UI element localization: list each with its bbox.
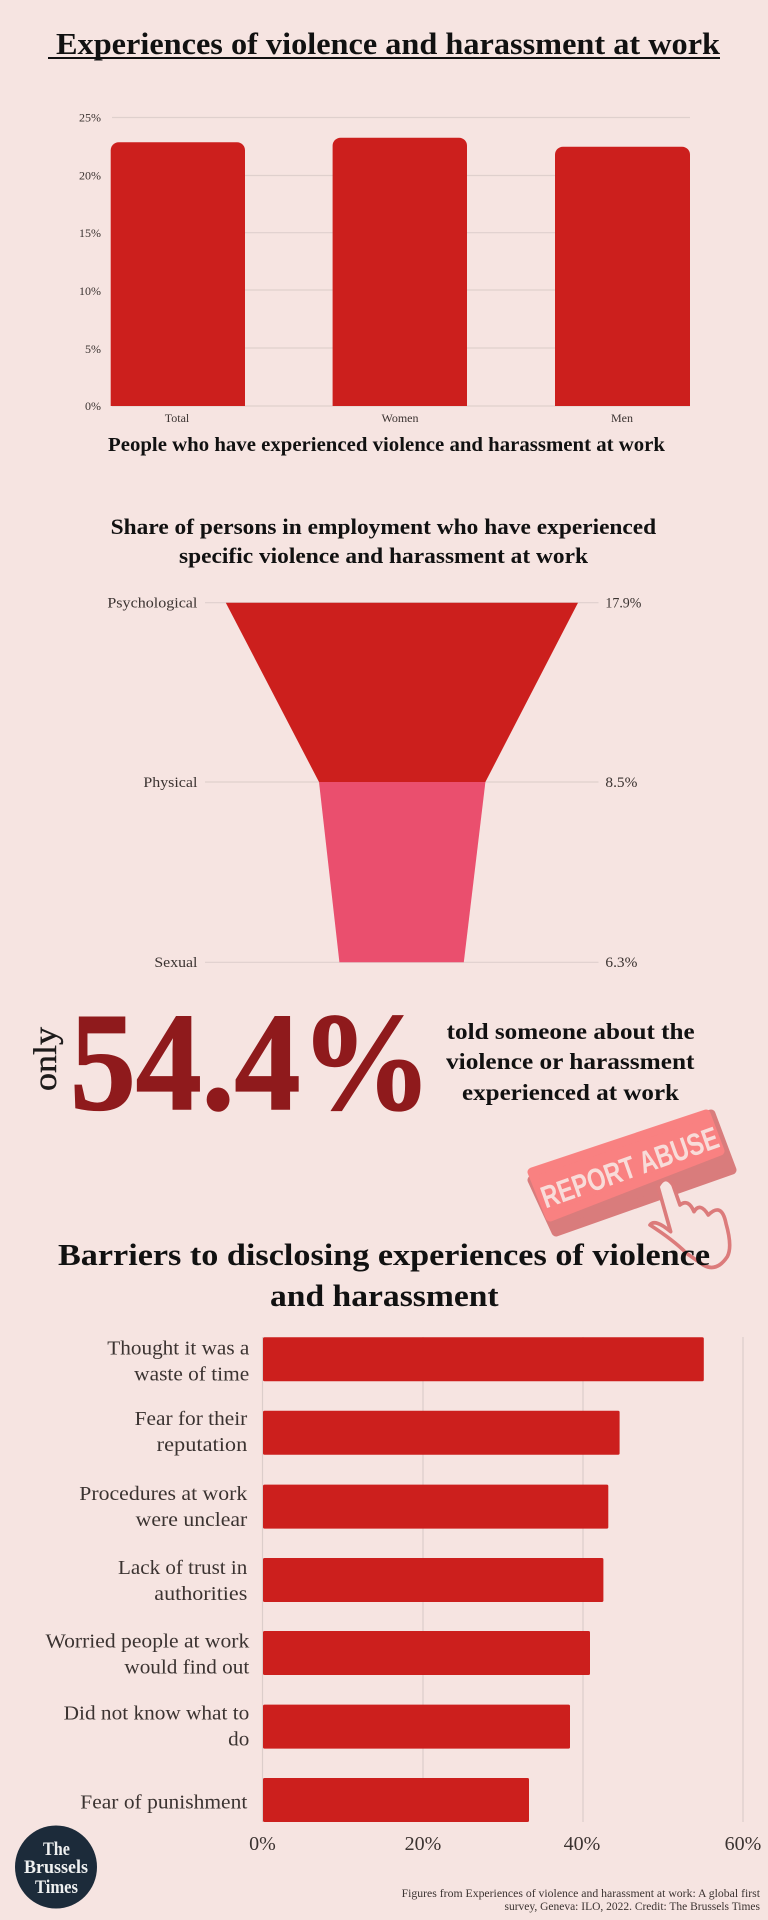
y axis labels (79, 110, 101, 413)
heading: barriers: and harassment (270, 1278, 499, 1313)
statistic description (446, 1019, 695, 1105)
funnel category labels: Physical (143, 775, 197, 791)
y axis labels: 25% (79, 110, 101, 124)
bar labels: authorities (154, 1583, 248, 1605)
bar labels: Did not know what to (64, 1702, 249, 1724)
y axis labels: 20% (79, 168, 101, 182)
bar labels: were unclear (136, 1509, 248, 1531)
funnel value labels: 6.3% (605, 955, 637, 971)
statistic description: violence or harassment (446, 1049, 695, 1074)
funnel category labels: Sexual (154, 955, 197, 971)
bar labels: Procedures at work (79, 1483, 247, 1505)
bar labels (46, 1338, 250, 1814)
button top (532, 1114, 720, 1217)
bars (263, 1337, 704, 1822)
y axis labels: 10% (79, 284, 101, 298)
logo: The Brussels Times: Brussels (24, 1857, 88, 1878)
panel: column chart of people who experienced violence (79, 110, 690, 425)
number: 54.4%: 54.4% (70, 985, 432, 1140)
funnel segment: psychological (226, 603, 578, 782)
funnel segment: physical and sexual (319, 782, 485, 962)
x axis labels: 40% (564, 1833, 600, 1855)
x axis labels: 20% (405, 1833, 441, 1855)
heading: share of persons: specific violence and harassment at work (179, 543, 589, 568)
panel: barriers horizontal bar chart (46, 1337, 761, 1855)
source note: Figures from Experiences of violence and harassment at work: A global first (402, 1888, 761, 1900)
bar labels: would find out (124, 1657, 250, 1679)
bar: women (333, 138, 467, 406)
bar labels: Worried people at work (46, 1631, 249, 1653)
source note: survey, Geneva: ILO, 2022. Credit: The Brussels Times (504, 1901, 761, 1913)
x axis labels: Men (611, 411, 633, 425)
y axis labels: 5% (85, 342, 101, 356)
heading: barriers: Barriers to disclosing experiences of violence (58, 1237, 710, 1272)
funnel value labels: 17.9% (605, 596, 641, 612)
bar labels: reputation (157, 1434, 247, 1456)
hand (650, 1180, 730, 1267)
x axis labels: Women (381, 411, 419, 425)
panel: funnel chart (107, 596, 641, 971)
bar labels: Lack of trust in (118, 1557, 247, 1579)
heading: share of persons (111, 514, 656, 568)
x axis labels (165, 411, 633, 425)
x axis labels (249, 1833, 761, 1855)
y axis labels: 0% (85, 399, 101, 413)
funnel value labels: 8.5% (605, 775, 637, 791)
source note (402, 1888, 761, 1913)
title: Experiences of violence and harassment at work (56, 26, 721, 61)
y axis labels: 15% (79, 226, 101, 240)
statistic description: experienced at work (462, 1080, 679, 1105)
funnel category labels: Psychological (107, 596, 197, 612)
logo: The Brussels Times: Times (35, 1877, 78, 1898)
heading: barriers (58, 1237, 710, 1313)
bar labels: Fear for their (135, 1408, 248, 1430)
label: only: only (28, 1026, 64, 1091)
statistic description: told someone about the (447, 1019, 695, 1044)
funnel category labels (107, 596, 197, 971)
x axis labels: 0% (249, 1833, 276, 1855)
bar labels: waste of time (134, 1364, 249, 1386)
bar: men (555, 147, 690, 406)
bar labels: do (228, 1729, 249, 1751)
funnel value labels (605, 596, 641, 971)
chart caption: People who have experienced violence and harassment at work (108, 434, 666, 456)
x axis labels: 60% (725, 1833, 761, 1855)
big statistic (28, 985, 432, 1140)
bar labels: Thought it was a (107, 1338, 249, 1360)
logo: The Brussels Times (15, 1826, 97, 1908)
logo: The Brussels Times: The (43, 1839, 70, 1860)
icon: report abuse button with pointing hand (532, 1114, 732, 1267)
bar labels: Fear of punishment (80, 1792, 248, 1814)
button side (532, 1114, 732, 1232)
x axis labels: Total (165, 411, 190, 425)
bar: total (111, 142, 245, 406)
heading: share of persons: Share of persons in employment who have experienced (111, 514, 656, 539)
